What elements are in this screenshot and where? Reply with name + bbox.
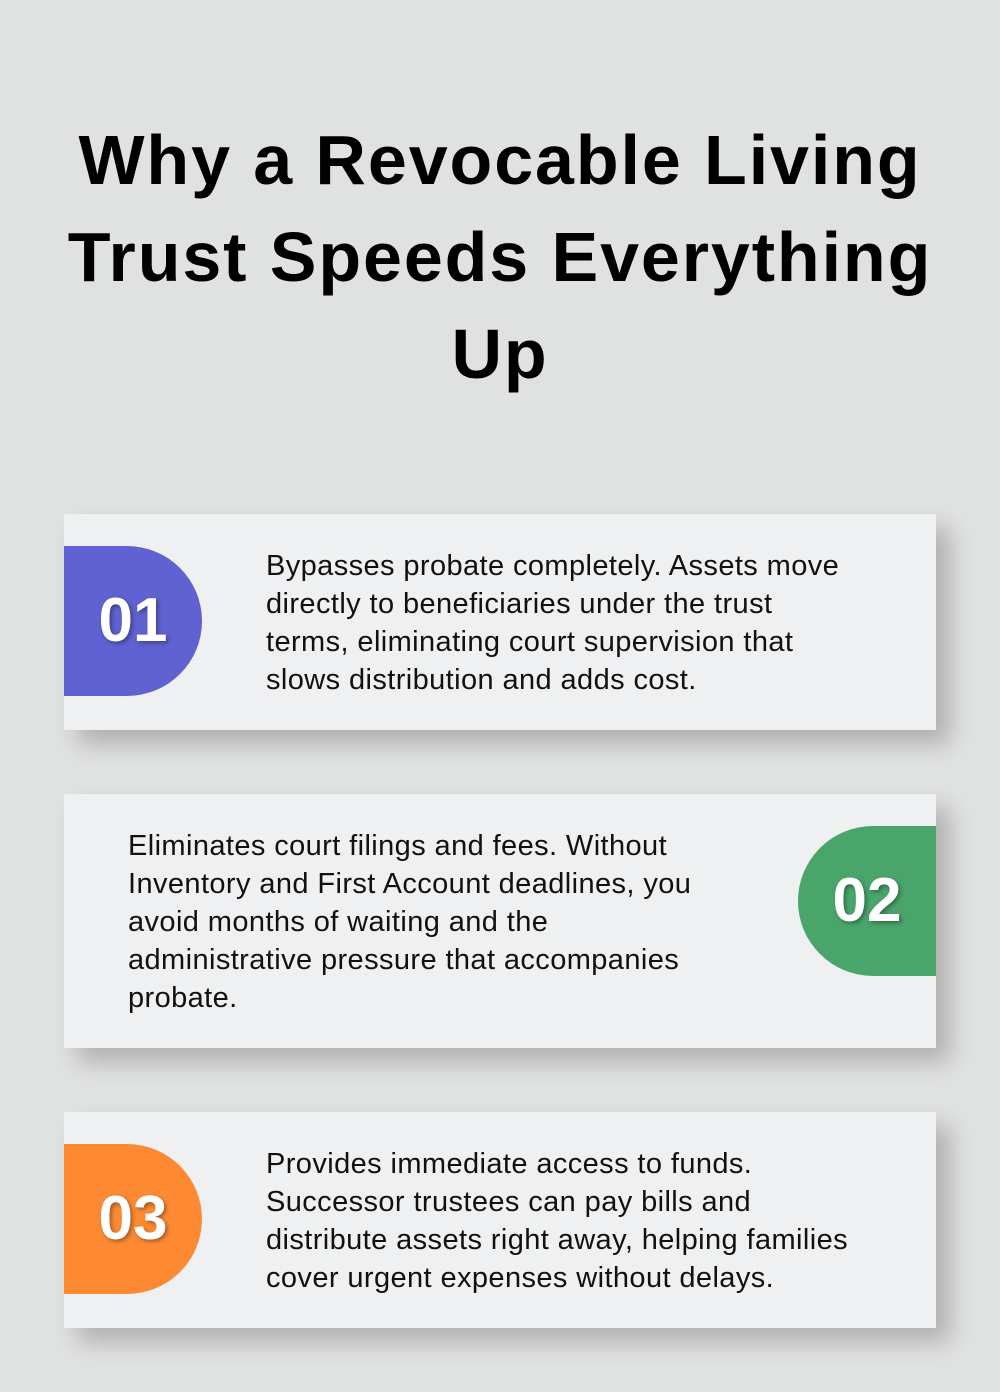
text: step 03: distribute assets right away, helping families (266, 1224, 848, 1256)
text: step 02: avoid months of waiting and the (128, 906, 548, 938)
text: step 02: administrative pressure that accompanies (128, 944, 679, 976)
title: Up (451, 315, 549, 393)
panel: step 02 (64, 794, 936, 1048)
panel: step 03 (64, 1112, 936, 1328)
badge: 03: 03 (99, 1184, 167, 1253)
text: step 01: Bypasses probate completely. Assets move (266, 550, 839, 582)
badge: 03 (64, 1144, 202, 1294)
title: Trust Speeds Everything (68, 218, 932, 296)
title: Why a Revocable Living (78, 121, 922, 199)
text: step 01 (266, 550, 839, 696)
text: step 03 (266, 1148, 848, 1294)
text: step 02 (128, 830, 691, 1014)
text: step 03: cover urgent expenses without delays. (266, 1262, 774, 1294)
text: step 03: Successor trustees can pay bills and (266, 1186, 751, 1218)
badge: 02 (798, 826, 936, 976)
text: step 03: Provides immediate access to funds. (266, 1148, 752, 1180)
text: step 02: Eliminates court filings and fees. Without (128, 830, 667, 862)
badge: 01: 01 (99, 586, 167, 655)
text: step 02: probate. (128, 982, 238, 1014)
text: step 01: directly to beneficiaries under the trust (266, 588, 772, 620)
badge: 02: 02 (833, 866, 901, 935)
text: step 02: Inventory and First Account deadlines, you (128, 868, 691, 900)
badge: 01 (64, 546, 202, 696)
text: step 01: slows distribution and adds cost. (266, 664, 697, 696)
panel: step 01 (64, 514, 936, 730)
title (68, 121, 932, 393)
text: step 01: terms, eliminating court supervision that (266, 626, 793, 658)
